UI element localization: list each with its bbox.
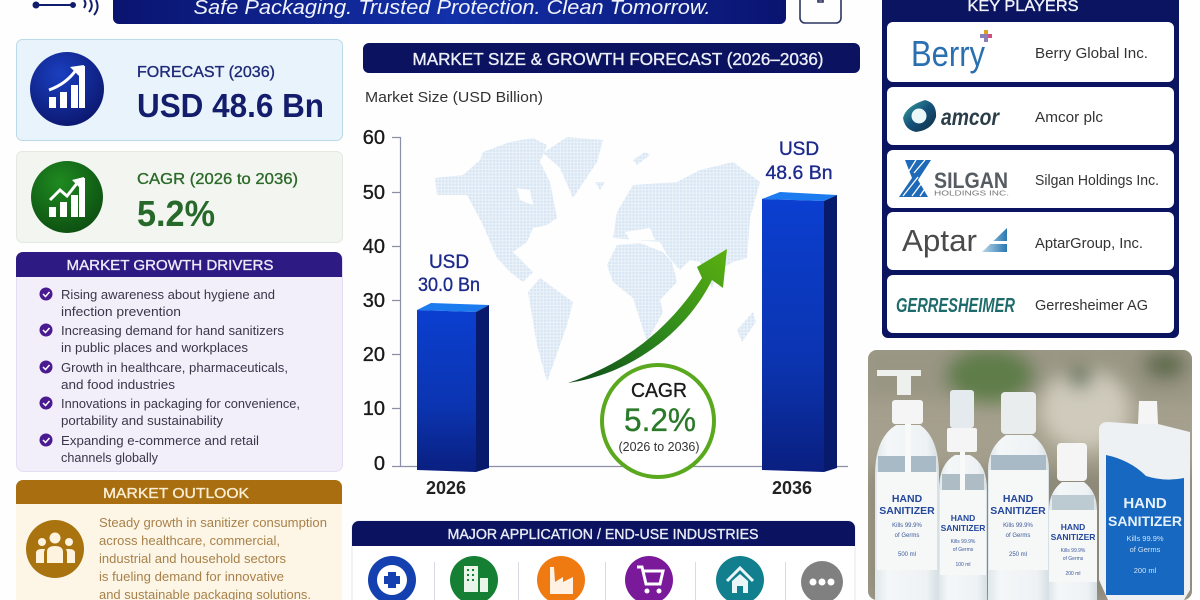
bottle 3: flip cap: SANITIZER (990, 505, 1046, 517)
driver list text: infection prevention (61, 304, 181, 319)
row: Silgan (887, 150, 1174, 208)
CAGR badge (602, 365, 714, 477)
driver list text: Innovations in packaging for convenience, (61, 396, 300, 411)
CAGR value: 5.2% (137, 193, 215, 234)
y axis labels: 20 (363, 344, 385, 366)
panel: CAGR (16, 152, 342, 242)
driver list text: Expanding e-commerce and retail (61, 433, 259, 448)
row: Aptar: AptarGroup, Inc. (1035, 235, 1143, 252)
y axis labels: 50 (363, 182, 385, 204)
y axis labels: 0 (374, 453, 385, 475)
driver list text: channels globally (61, 450, 158, 465)
outlook text: is fueling demand for innovative (99, 569, 284, 584)
industries heading (352, 521, 855, 546)
bottle 4: small: Kills 99.9% (1061, 548, 1086, 554)
row: Aptar (887, 212, 1174, 270)
bottle 2: spray: HAND (951, 513, 975, 523)
axes (392, 138, 848, 466)
bottle 4: small (1049, 443, 1097, 600)
bottle 1: pump: of Germs (895, 533, 919, 539)
outlook text: across healthcare, commercial, (99, 533, 280, 548)
row: Silgan: Silgan Holdings Inc. (1035, 172, 1159, 189)
row: Amcor: Amcor plc (1035, 109, 1104, 126)
drivers heading (16, 252, 342, 277)
pouch: Kills 99.9% (1126, 534, 1164, 543)
pouch: SANITIZER (1108, 513, 1182, 529)
driver list text: Increasing demand for hand sanitizers (61, 323, 285, 338)
bar 2036 (762, 192, 837, 472)
row: Amcor: amcor (941, 104, 1000, 130)
industries heading: MAJOR APPLICATION / END-USE INDUSTRIES (448, 527, 758, 543)
row: Berry: Berry (911, 33, 985, 74)
bottle 1: pump: 500 ml (898, 552, 916, 558)
bottle 3: flip cap: 250 ml (1009, 552, 1027, 558)
outlook text (99, 515, 327, 600)
driver list text: in public places and workplaces (61, 340, 249, 355)
forecast label: FORECAST (2036) (137, 64, 275, 81)
bottle 2: spray: Kills 99.9% (951, 539, 976, 545)
row: Aptar: Aptar (902, 223, 977, 258)
value label 2026: 30.0 Bn (418, 275, 480, 296)
bottle 3: flip cap (988, 392, 1049, 600)
panel: market growth drivers (16, 252, 342, 472)
bottle 3: flip cap: of Germs (1006, 533, 1030, 539)
pouch (1099, 401, 1190, 600)
pouch: HAND (1123, 495, 1167, 512)
chart axis title: Market Size (USD Billion) (365, 89, 543, 106)
driver list text (61, 287, 300, 465)
icon: forecast growth chart (30, 52, 104, 126)
bottle 3: flip cap: HAND (1003, 493, 1034, 505)
driver list text: Rising awareness about hygiene and (61, 287, 275, 302)
y axis labels: 40 (363, 236, 385, 258)
CAGR label: CAGR (2026 to 2036) (137, 171, 298, 188)
panel: forecast (16, 40, 342, 140)
product photo: sanitizer bottles (860, 340, 1200, 600)
bottle 1: pump: SANITIZER (879, 505, 935, 517)
bottle 2: spray: 100 ml (955, 562, 971, 568)
icon: shopping cart (625, 556, 673, 600)
bottle 3: flip cap: Kills 99.9% (1003, 523, 1034, 529)
forecast value: USD 48.6 Bn (137, 87, 324, 124)
bar chart (363, 127, 848, 498)
bottle 1: pump: Kills 99.9% (892, 523, 923, 529)
row: Silgan: HOLDINGS INC. (934, 188, 1009, 198)
y axis labels: 30 (363, 290, 385, 312)
driver list text: and food industries (61, 377, 176, 392)
world map backdrop (435, 137, 760, 382)
row: Berry: Berry Global Inc. (1035, 45, 1148, 62)
pouch: 200 ml (1134, 566, 1157, 575)
map cut-outs (517, 188, 655, 240)
bottle 4: small: of Germs (1063, 556, 1084, 562)
row: Berry (887, 22, 1174, 82)
icon: factory (537, 556, 585, 600)
driver list text: portability and sustainability (61, 413, 224, 428)
outlook heading (16, 480, 342, 504)
row: Gerresheimer: GERRESHEIMER (896, 295, 1015, 317)
pouch: of Germs (1130, 545, 1161, 554)
bottle 2: spray (939, 390, 987, 600)
bottle 2: spray: SANITIZER (941, 523, 985, 533)
value label 2036: 48.6 Bn (766, 163, 832, 184)
row: Silgan: SILGAN (934, 168, 1008, 193)
chart heading: MARKET SIZE & GROWTH FORECAST (2026–2036) (412, 49, 824, 69)
x axis labels: 2026 (426, 478, 466, 498)
CAGR badge: 5.2% (624, 402, 696, 438)
x axis labels (426, 478, 812, 498)
value label 2026: USD (429, 252, 469, 273)
CAGR badge: (2026 to 2036) (618, 439, 700, 454)
header banner (113, 0, 786, 24)
panel: market outlook (16, 480, 342, 600)
bottle 4: small: 200 ml (1065, 571, 1081, 577)
value label 2026 (418, 252, 480, 296)
row: Gerresheimer (887, 275, 1174, 333)
icon: CAGR growth chart (31, 161, 103, 233)
icon: other (801, 561, 843, 600)
panel: key players (882, 0, 1179, 338)
row: Amcor (887, 87, 1174, 145)
outlook text: industrial and household sectors (99, 551, 286, 566)
panel: end-use industries (352, 521, 855, 600)
icon: commercial building (450, 556, 498, 600)
CAGR badge: CAGR (631, 380, 687, 402)
x axis labels: 2036 (772, 478, 812, 498)
y axis labels: 60 (363, 127, 385, 149)
chart heading (363, 43, 860, 73)
icon: household (716, 556, 764, 600)
bottle 2: spray: of Germs (953, 547, 974, 553)
bottle 1: pump: HAND (892, 493, 923, 505)
growth arrow (568, 249, 727, 383)
value label 2036 (766, 139, 832, 184)
bottle 4: small: HAND (1061, 522, 1085, 532)
value label 2036: USD (779, 139, 819, 160)
icon: healthcare (368, 556, 416, 600)
bottle 1: pump (875, 370, 939, 600)
bottle 4: small: SANITIZER (1051, 532, 1095, 542)
drivers heading: MARKET GROWTH DRIVERS (66, 257, 274, 274)
row: Gerresheimer: Gerresheimer AG (1035, 297, 1148, 314)
icon: people group (26, 520, 84, 578)
outlook text: Steady growth in sanitizer consumption (99, 515, 327, 530)
driver bullets (40, 288, 52, 446)
y axis labels: 10 (363, 398, 385, 420)
icon: top-left connected signal (34, 0, 98, 15)
outlook heading: MARKET OUTLOOK (103, 485, 249, 502)
bar 2026 (417, 303, 489, 472)
driver list text: Growth in healthcare, pharmaceuticals, (61, 360, 288, 375)
y axis labels (363, 127, 385, 475)
icon: top-right outline box (800, 0, 841, 23)
